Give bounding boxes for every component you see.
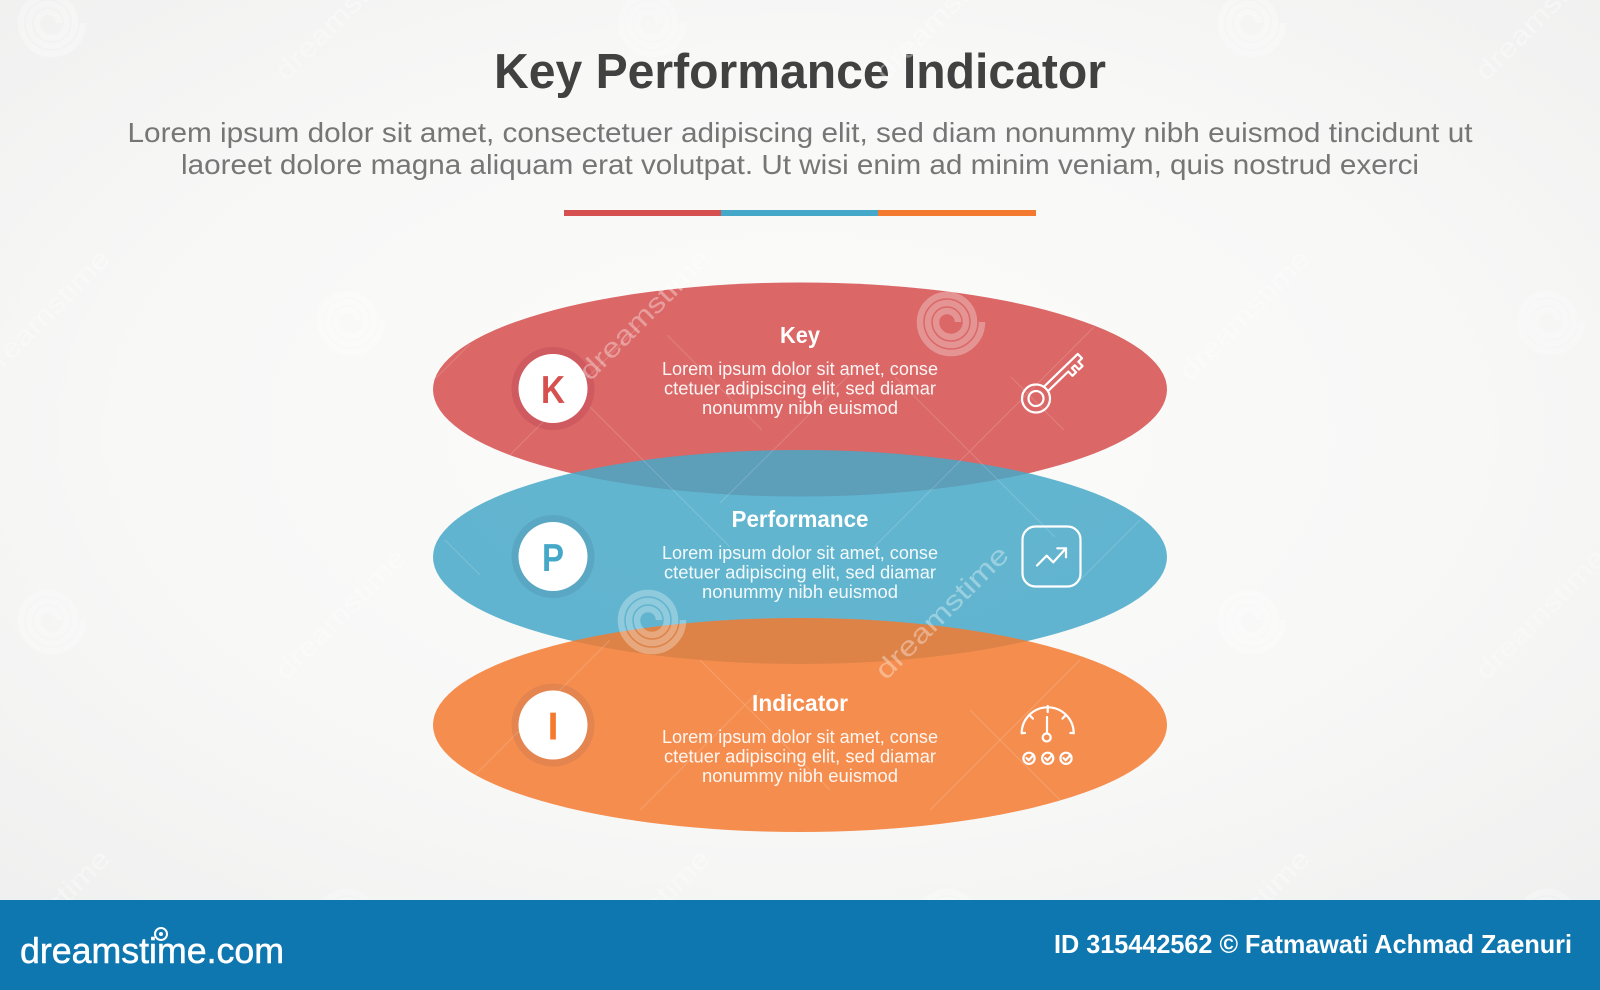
ellipse: indicator [433,618,1167,832]
text block: indicator: Indicator [752,690,848,716]
watermark text: dreamstime [269,542,412,685]
icon: chart [1022,526,1080,586]
badge: P: P [542,537,564,580]
badge: K: K [541,369,565,412]
badge: I [512,684,594,766]
icon: gauge [1022,706,1074,764]
text block: performance [662,506,938,602]
watermark text: dreamstime [573,243,716,386]
text block: performance: Performance [732,506,868,532]
text block: indicator: nonummy nibh euismod [702,766,898,786]
watermark text: dreamstime [1173,243,1316,386]
text block: performance: nonummy nibh euismod [702,582,898,602]
text block: key: Key [780,322,820,348]
footer logo: dreamstime.com [20,930,284,971]
stacked ellipses [433,282,1167,832]
ellipse: key [433,282,1167,496]
text block: indicator [662,690,938,786]
watermark text: dreamstime [1173,843,1316,986]
badge: P [512,515,594,598]
ellipse: performance [433,450,1167,664]
badge: K [512,347,594,430]
text block: performance: ctetuer adipiscing elit, sed diamar [664,563,936,583]
text block: key: nonummy nibh euismod [702,398,898,418]
badge: I: I [548,706,558,748]
text block: performance: Lorem ipsum dolor sit amet, conse [662,543,938,563]
text block: key: ctetuer adipiscing elit, sed diamar [664,379,936,399]
title: Key Performance Indicator [494,45,1106,99]
text block: indicator: Lorem ipsum dolor sit amet, conse [662,727,938,747]
text block: key: Lorem ipsum dolor sit amet, conse [662,359,938,379]
watermark text: dreamstime [1469,542,1600,685]
footer credit: ID 315442562 © Fatmawati Achmad Zaenuri [1054,929,1572,959]
icon: key [1016,346,1090,418]
watermark text: dreamstime [869,540,1015,685]
text block: indicator: ctetuer adipiscing elit, sed diamar [664,747,936,767]
watermark lines [436,325,1140,810]
watermark text: dreamstime [573,843,716,986]
text block: key [662,322,938,418]
subtitle text [128,117,1473,180]
subtitle text: laoreet dolore magna aliquam erat volutpat. Ut wisi enim ad minim veniam, quis nostrud exerci [181,149,1419,180]
subtitle text: Lorem ipsum dolor sit amet, consectetuer adipiscing elit, sed diam nonummy nibh euismod tincidunt ut [128,117,1473,148]
footer bar [0,900,1600,990]
tri-colour divider [564,210,1036,216]
